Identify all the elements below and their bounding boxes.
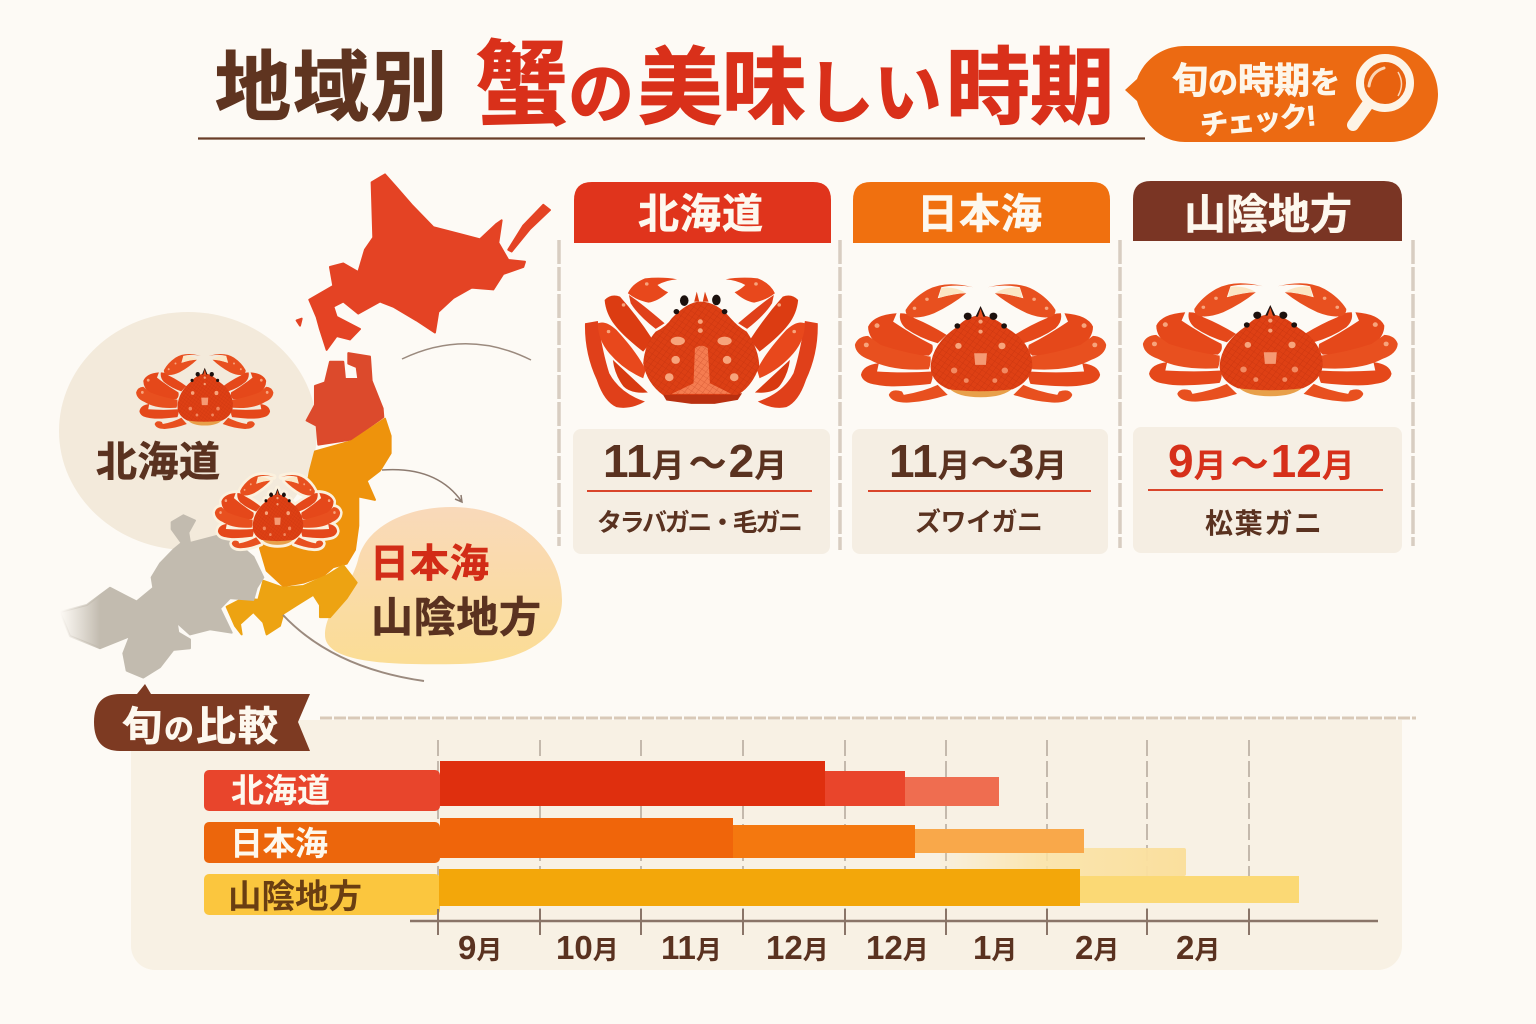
bars: Hokkaido: 北海道 bbox=[231, 772, 330, 809]
panel: Hokkaido bbox=[573, 182, 831, 554]
map region: Tohoku bbox=[307, 353, 383, 445]
season box: San'in: 松葉ガニ bbox=[1205, 508, 1322, 539]
month axis: 12月 bbox=[866, 929, 929, 966]
month axis: 12月 bbox=[766, 929, 829, 966]
label: Hokkaido: 北海道 bbox=[96, 439, 220, 485]
bars: Sea of Japan: 日本海 bbox=[230, 825, 328, 862]
icon: magnifying glass bbox=[1353, 58, 1410, 125]
map crab halo: Sea of Japan bbox=[215, 475, 340, 548]
bars: San'in: 山陰地方 bbox=[228, 879, 362, 916]
card header: San'in: 山陰地方 bbox=[1184, 191, 1352, 238]
crab illustration: king crab bbox=[585, 278, 818, 408]
month grid lines bbox=[438, 740, 1249, 915]
map bubble: Hokkaido bbox=[59, 312, 317, 550]
map crab: Hokkaido bubble bbox=[136, 354, 273, 429]
card header: Hokkaido bbox=[574, 182, 831, 243]
map region: Sea of Japan side bbox=[260, 419, 391, 586]
month axis: 10月 bbox=[556, 929, 619, 966]
section heading: season comparison bbox=[94, 684, 310, 751]
season box: Sea of Japan bbox=[852, 429, 1108, 554]
dashed column dividers bbox=[559, 240, 1413, 550]
connector curve: Hokkaido bbox=[402, 344, 531, 360]
month axis: 2月 bbox=[1176, 929, 1220, 966]
section heading: season comparison: 旬の比較 bbox=[122, 705, 280, 749]
season box: San'in: 9月～12月 bbox=[1168, 435, 1355, 487]
season box: Sea of Japan: ズワイガニ bbox=[915, 507, 1043, 537]
card header: Hokkaido: 北海道 bbox=[638, 191, 763, 237]
month axis: 1月 bbox=[973, 929, 1017, 966]
map of Japan bbox=[60, 174, 550, 678]
map crab: Sea of Japan bbox=[215, 475, 340, 548]
crab illustration: Matsuba crab bbox=[1143, 283, 1398, 402]
map region: Hokkaido bbox=[297, 174, 550, 350]
card header: Sea of Japan bbox=[853, 182, 1110, 243]
callout: check the season: チェック! bbox=[1199, 100, 1317, 141]
title: 地域別 bbox=[215, 46, 447, 131]
season box: San'in bbox=[1133, 427, 1402, 553]
title: 蟹の美味しい時期 bbox=[476, 35, 1114, 137]
callout: check the season bbox=[1125, 46, 1438, 142]
title bbox=[198, 35, 1145, 138]
month axis: 2月 bbox=[1075, 929, 1119, 966]
map bubble: Sea of Japan and San'in bbox=[325, 507, 562, 664]
month axis: 9月 bbox=[458, 929, 502, 966]
bars: Hokkaido bbox=[204, 761, 999, 811]
panel: San'in bbox=[1133, 181, 1402, 553]
month axis bbox=[410, 909, 1378, 966]
arrow: to Sea of Japan bubble bbox=[382, 470, 462, 502]
season box: Sea of Japan: 11月～3月 bbox=[889, 435, 1067, 487]
map region: San'in bbox=[227, 565, 357, 634]
bars: San'in bbox=[204, 869, 1299, 916]
label: San'in: 山陰地方 bbox=[371, 594, 541, 641]
panel: season comparison chart bbox=[131, 718, 1416, 970]
map region: western Japan in grey bbox=[60, 515, 263, 678]
season box: Hokkaido bbox=[573, 429, 830, 554]
season box: Hokkaido: 11月～2月 bbox=[603, 435, 787, 487]
connector curve: San'in bbox=[283, 615, 424, 681]
callout: check the season: 旬の時期を bbox=[1172, 60, 1340, 101]
label: Sea of Japan: 日本海 bbox=[370, 543, 489, 586]
card header: San'in bbox=[1133, 181, 1402, 241]
bars: Sea of Japan bbox=[204, 818, 1186, 876]
crab illustration: snow crab bbox=[855, 284, 1106, 403]
season box: Hokkaido: タラバガニ・毛ガニ bbox=[597, 509, 803, 537]
card header: Sea of Japan: 日本海 bbox=[917, 191, 1042, 237]
panel: Sea of Japan bbox=[852, 182, 1110, 554]
month axis: 11月 bbox=[661, 929, 722, 966]
